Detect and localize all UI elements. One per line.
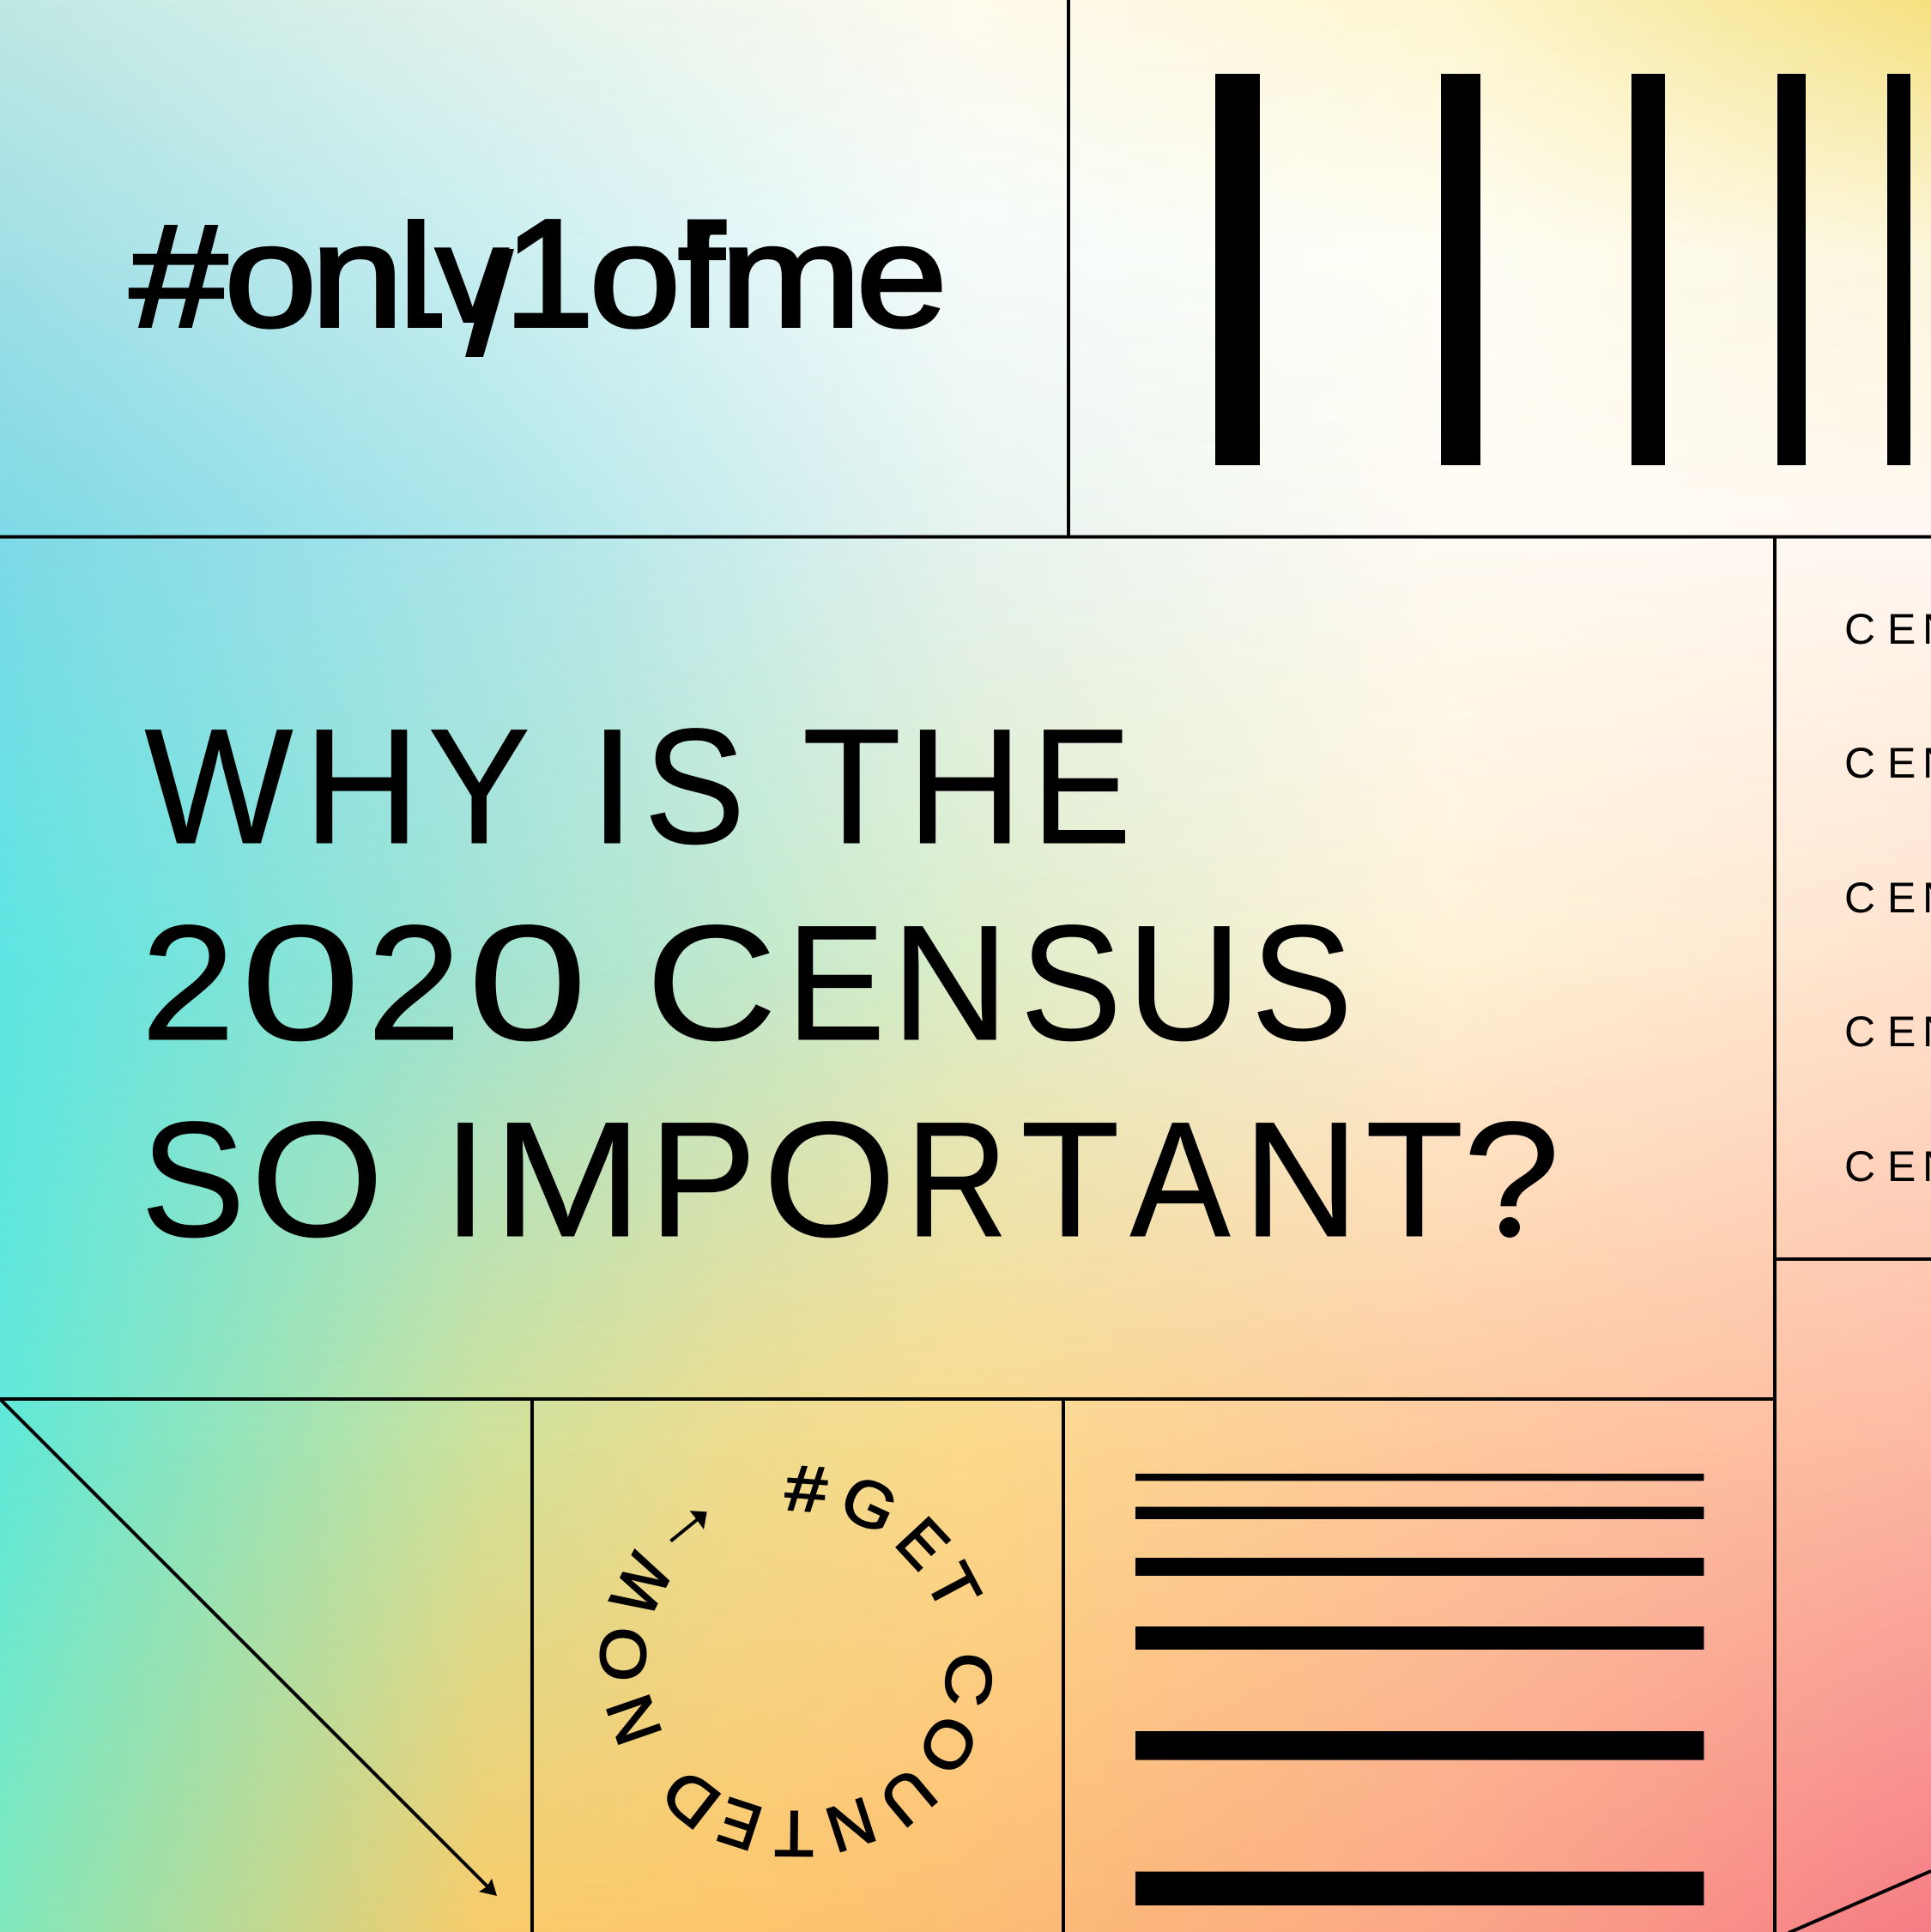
circular badge: #get counted now: T [774,1797,814,1870]
circular badge: #get counted now: N [592,1686,675,1753]
heading: why is the 2020 census so important?: R [906,1087,1008,1271]
heading: why is the 2020 census so important?: 0 [240,892,360,1075]
heading: why is the 2020 census so important?: T [1365,1088,1463,1271]
corner line: diagonal at the bottom right [1789,1871,1931,1932]
heading: why is the 2020 census so important?: A [1130,1087,1230,1271]
heading: why is the 2020 census so important?: N [1244,1087,1359,1271]
circular badge: #get counted now: N [818,1784,884,1867]
hashtag: #only1ofme: n [311,194,403,357]
heading: why is the 2020 census so important?: 2 [141,892,235,1075]
circular badge: #get counted now: O [586,1626,660,1682]
heading: why is the 2020 census so important?: I [590,695,635,878]
heading: why is the 2020 census so important?: T [802,695,901,878]
heading: why is the 2020 census so important?: O [763,1088,896,1271]
heading: why is the 2020 census so important?: H [304,695,420,878]
hashtag: #only1ofme: y [436,195,507,357]
arrow: diagonal pointing to the lower right [0,1399,497,1896]
heading: why is the 2020 census so important?: 0 [468,892,587,1075]
hashtag: #only1ofme [129,219,942,357]
heading: why is the 2020 census so important?: O [251,1088,384,1271]
circular badge: #get counted now: C [929,1649,1007,1710]
circular badge: #get counted now: E [710,1784,770,1864]
hashtag: #only1ofme: o [225,194,317,357]
heading: why is the 2020 census so important?: I [444,1088,487,1271]
circular badge: #get counted now: W [597,1544,687,1627]
hashtag: #only1ofme: 1 [504,188,594,359]
side list: repeated census labels clipped at the page edge [1844,605,1931,1190]
circular badge: #get counted now: G [830,1461,908,1548]
circular badge: #get counted now: T [911,1553,994,1622]
heading: why is the 2020 census so important?: W [144,695,293,878]
hashtag: #only1ofme: l [399,194,433,357]
heading: why is the 2020 census so important?: S [644,694,745,877]
heading: why is the 2020 census so important?: U [1127,891,1241,1075]
heading: why is the 2020 census so important?: H [907,694,1022,878]
circular badge: #get counted now: E [882,1505,962,1583]
heading: why is the 2020 census so important?: Y [428,696,530,878]
heading: why is the 2020 census so important?: S [141,1087,245,1271]
hashtag: #only1ofme: f [678,196,724,357]
heading: why is the 2020 census so important?: N [892,892,1009,1075]
circular badge: #get counted now: # [784,1452,829,1527]
heading: why is the 2020 census so important?: T [1020,1088,1120,1271]
circular badge: #get counted now: D [649,1755,733,1843]
barcode: five vertical bars narrowing to the right [1215,74,1910,465]
heading: why is the 2020 census so important?: M [493,1088,642,1271]
heading: why is the 2020 census so important? [141,694,1560,1271]
hashtag: #only1ofme: e [857,196,947,358]
hashtag: #only1ofme: m [720,195,862,358]
heading: why is the 2020 census so important?: 2 [367,892,461,1075]
circular badge: #get counted now: O [904,1704,993,1786]
hashtag: #only1ofme: o [590,195,681,358]
stripes: six horizontal bars growing thicker downward [1135,1474,1704,1905]
heading: why is the 2020 census so important?: ? [1463,1088,1560,1271]
arrow: small arrow closing the circular badge [671,1511,707,1541]
heading: why is the 2020 census so important?: E [787,892,885,1075]
circular badge: #get counted now: U [866,1753,949,1840]
circular badge: #get counted now [586,1452,1007,1870]
heading: why is the 2020 census so important?: C [645,892,777,1075]
heading: why is the 2020 census so important?: P [649,1089,756,1271]
heading: why is the 2020 census so important?: E [1032,694,1131,878]
heading: why is the 2020 census so important?: S [1251,891,1353,1074]
hashtag: #only1ofme: # [130,194,227,357]
heading: why is the 2020 census so important?: S [1020,891,1122,1074]
